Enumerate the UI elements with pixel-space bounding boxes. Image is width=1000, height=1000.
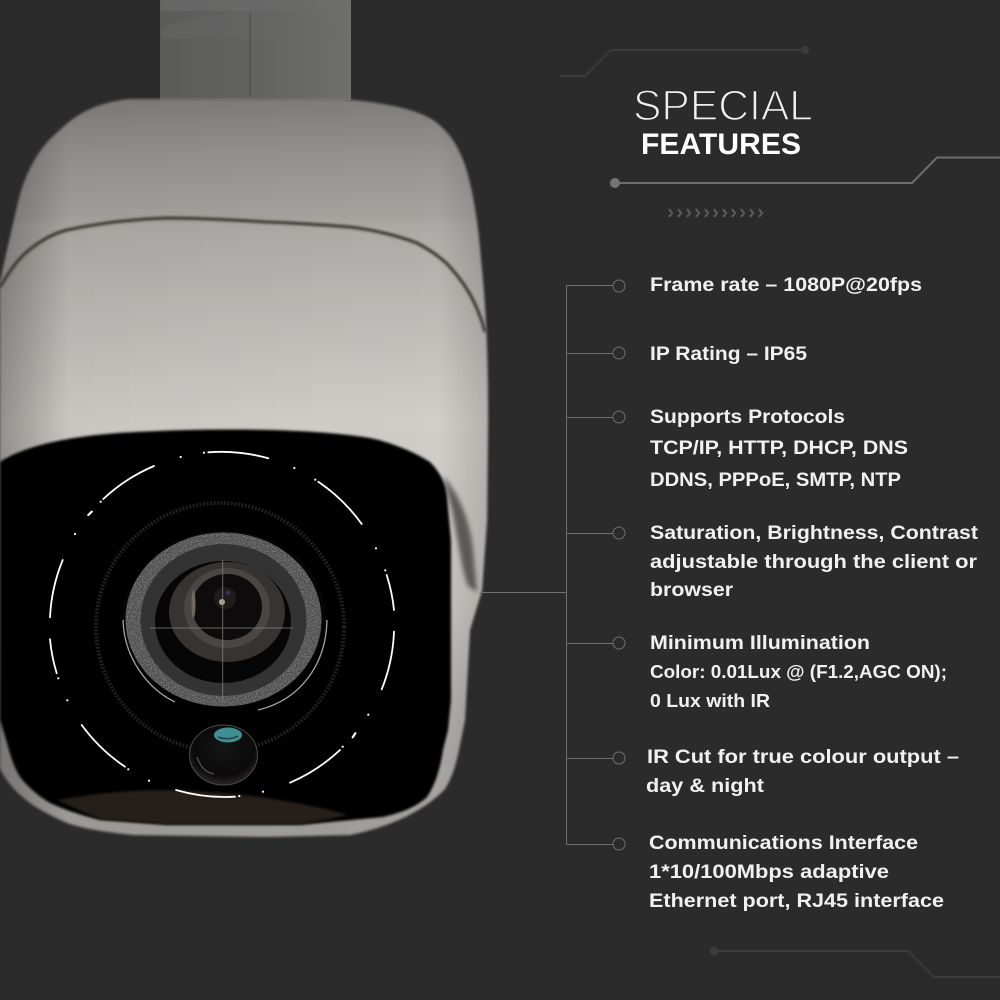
feature: minimum illumination: Minimum Illumination [650, 632, 870, 654]
camera photo [0, 0, 488, 837]
feature: image adjustment: browser [650, 579, 733, 601]
main lens [123, 530, 327, 710]
feature: image adjustment [650, 522, 979, 601]
white scanning arcs [50, 452, 394, 797]
feature: communications interface [649, 832, 944, 912]
connector tree [480, 280, 625, 850]
circuit decoration: bottom [710, 946, 1000, 977]
lens window [0, 430, 451, 825]
feature: communications interface: Ethernet port, RJ45 interface [649, 890, 944, 912]
feature: minimum illumination [650, 632, 947, 711]
feature: IR cut: IR Cut for true colour output – [647, 746, 959, 768]
lower reflection band [57, 790, 348, 824]
feature: protocols: DDNS, PPPoE, SMTP, NTP [650, 469, 901, 491]
feature: IR cut: day & night [646, 775, 765, 797]
feature: communications interface: 1*10/100Mbps adaptive [649, 861, 889, 883]
feature: communications interface: Communications Interface [649, 832, 918, 854]
feature: image adjustment: adjustable through the client or [650, 551, 977, 573]
circuit decoration: under heading [610, 158, 1000, 188]
IR LED [190, 725, 258, 785]
side shadow wedge [443, 476, 477, 592]
feature: frame rate: Frame rate – 1080P@20fps [650, 274, 922, 296]
camera mount neck [160, 0, 351, 100]
chevron row [669, 209, 762, 217]
heading: features: FEATURES [641, 128, 801, 161]
feature: protocols: TCP/IP, HTTP, DHCP, DNS [650, 437, 908, 459]
feature: minimum illumination: Color: 0.01Lux @ (F1.2,AGC ON); [650, 662, 947, 682]
arc dots [57, 452, 386, 797]
feature: IR cut [646, 746, 959, 797]
feature: IP rating: IP Rating – IP65 [650, 343, 807, 365]
feature: protocols [650, 406, 908, 491]
heading [633, 82, 813, 161]
circuit decoration: top [560, 46, 809, 76]
heading: special: SPECIAL [633, 82, 813, 130]
dotted focus ring [96, 503, 344, 751]
feature: image adjustment: Saturation, Brightness, Contrast [650, 522, 979, 544]
feature: protocols: Supports Protocols [650, 406, 845, 428]
feature: minimum illumination: 0 Lux with IR [650, 691, 770, 711]
camera housing [0, 99, 488, 837]
